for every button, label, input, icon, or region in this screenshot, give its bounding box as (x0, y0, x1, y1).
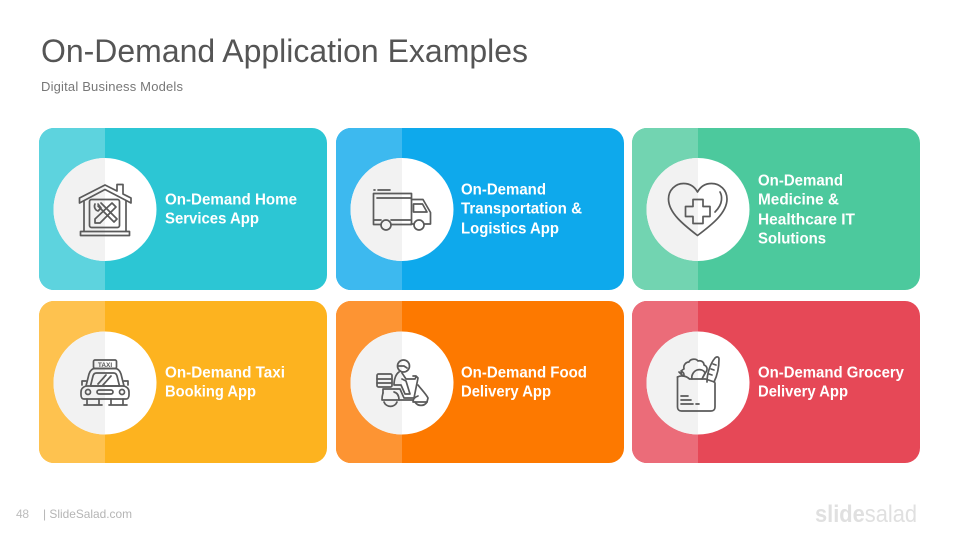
icon: house with tools (80, 184, 131, 236)
text: taxi booking (165, 364, 285, 400)
page number: 48 (16, 507, 29, 521)
text: transportation and logistics: On-Demand (461, 182, 546, 198)
text: medicine and healthcare (758, 172, 856, 248)
icon: taxi: TAXI (98, 362, 112, 369)
footer site name: | SlideSalad.com (43, 507, 132, 521)
logo wordmark: slidesalad (815, 501, 917, 528)
icon: taxi (81, 360, 129, 405)
panel: food delivery (336, 301, 624, 463)
text: taxi booking: On-Demand Taxi (165, 364, 285, 382)
icon: heart with cross (668, 184, 727, 236)
panel: transportation and logistics (336, 128, 624, 290)
text: food delivery: Delivery App (461, 384, 551, 400)
subtitle: Digital Business Models (41, 79, 184, 94)
text: home services (165, 192, 297, 228)
text: medicine and healthcare: Medicine & (758, 192, 839, 208)
icon: scooter courier (377, 360, 428, 406)
text: medicine and healthcare: On-Demand (758, 172, 843, 190)
text: transportation and logistics (461, 182, 582, 238)
text: transportation and logistics: Transportation & (461, 200, 582, 218)
panel: medicine and healthcare (632, 128, 920, 290)
icon: grocery bag (678, 357, 719, 411)
text: transportation and logistics: Logistics App (461, 220, 559, 238)
panel: home services (39, 128, 327, 290)
text: medicine and healthcare: Healthcare IT (758, 212, 856, 228)
panel: taxi booking (39, 301, 327, 463)
text: food delivery: On-Demand Food (461, 364, 587, 382)
text: medicine and healthcare: Solutions (758, 230, 826, 248)
text: taxi booking: Booking App (165, 384, 256, 400)
text: home services: Services App (165, 210, 259, 228)
text: grocery delivery: On-Demand Grocery (758, 364, 904, 382)
text: grocery delivery: Delivery App (758, 384, 848, 400)
text: grocery delivery (758, 364, 904, 400)
panel: grocery delivery (632, 301, 920, 463)
text: food delivery (461, 364, 587, 400)
icon: delivery truck (374, 190, 430, 230)
title: On-Demand Application Examples (41, 33, 528, 69)
text: home services: On-Demand Home (165, 192, 297, 208)
